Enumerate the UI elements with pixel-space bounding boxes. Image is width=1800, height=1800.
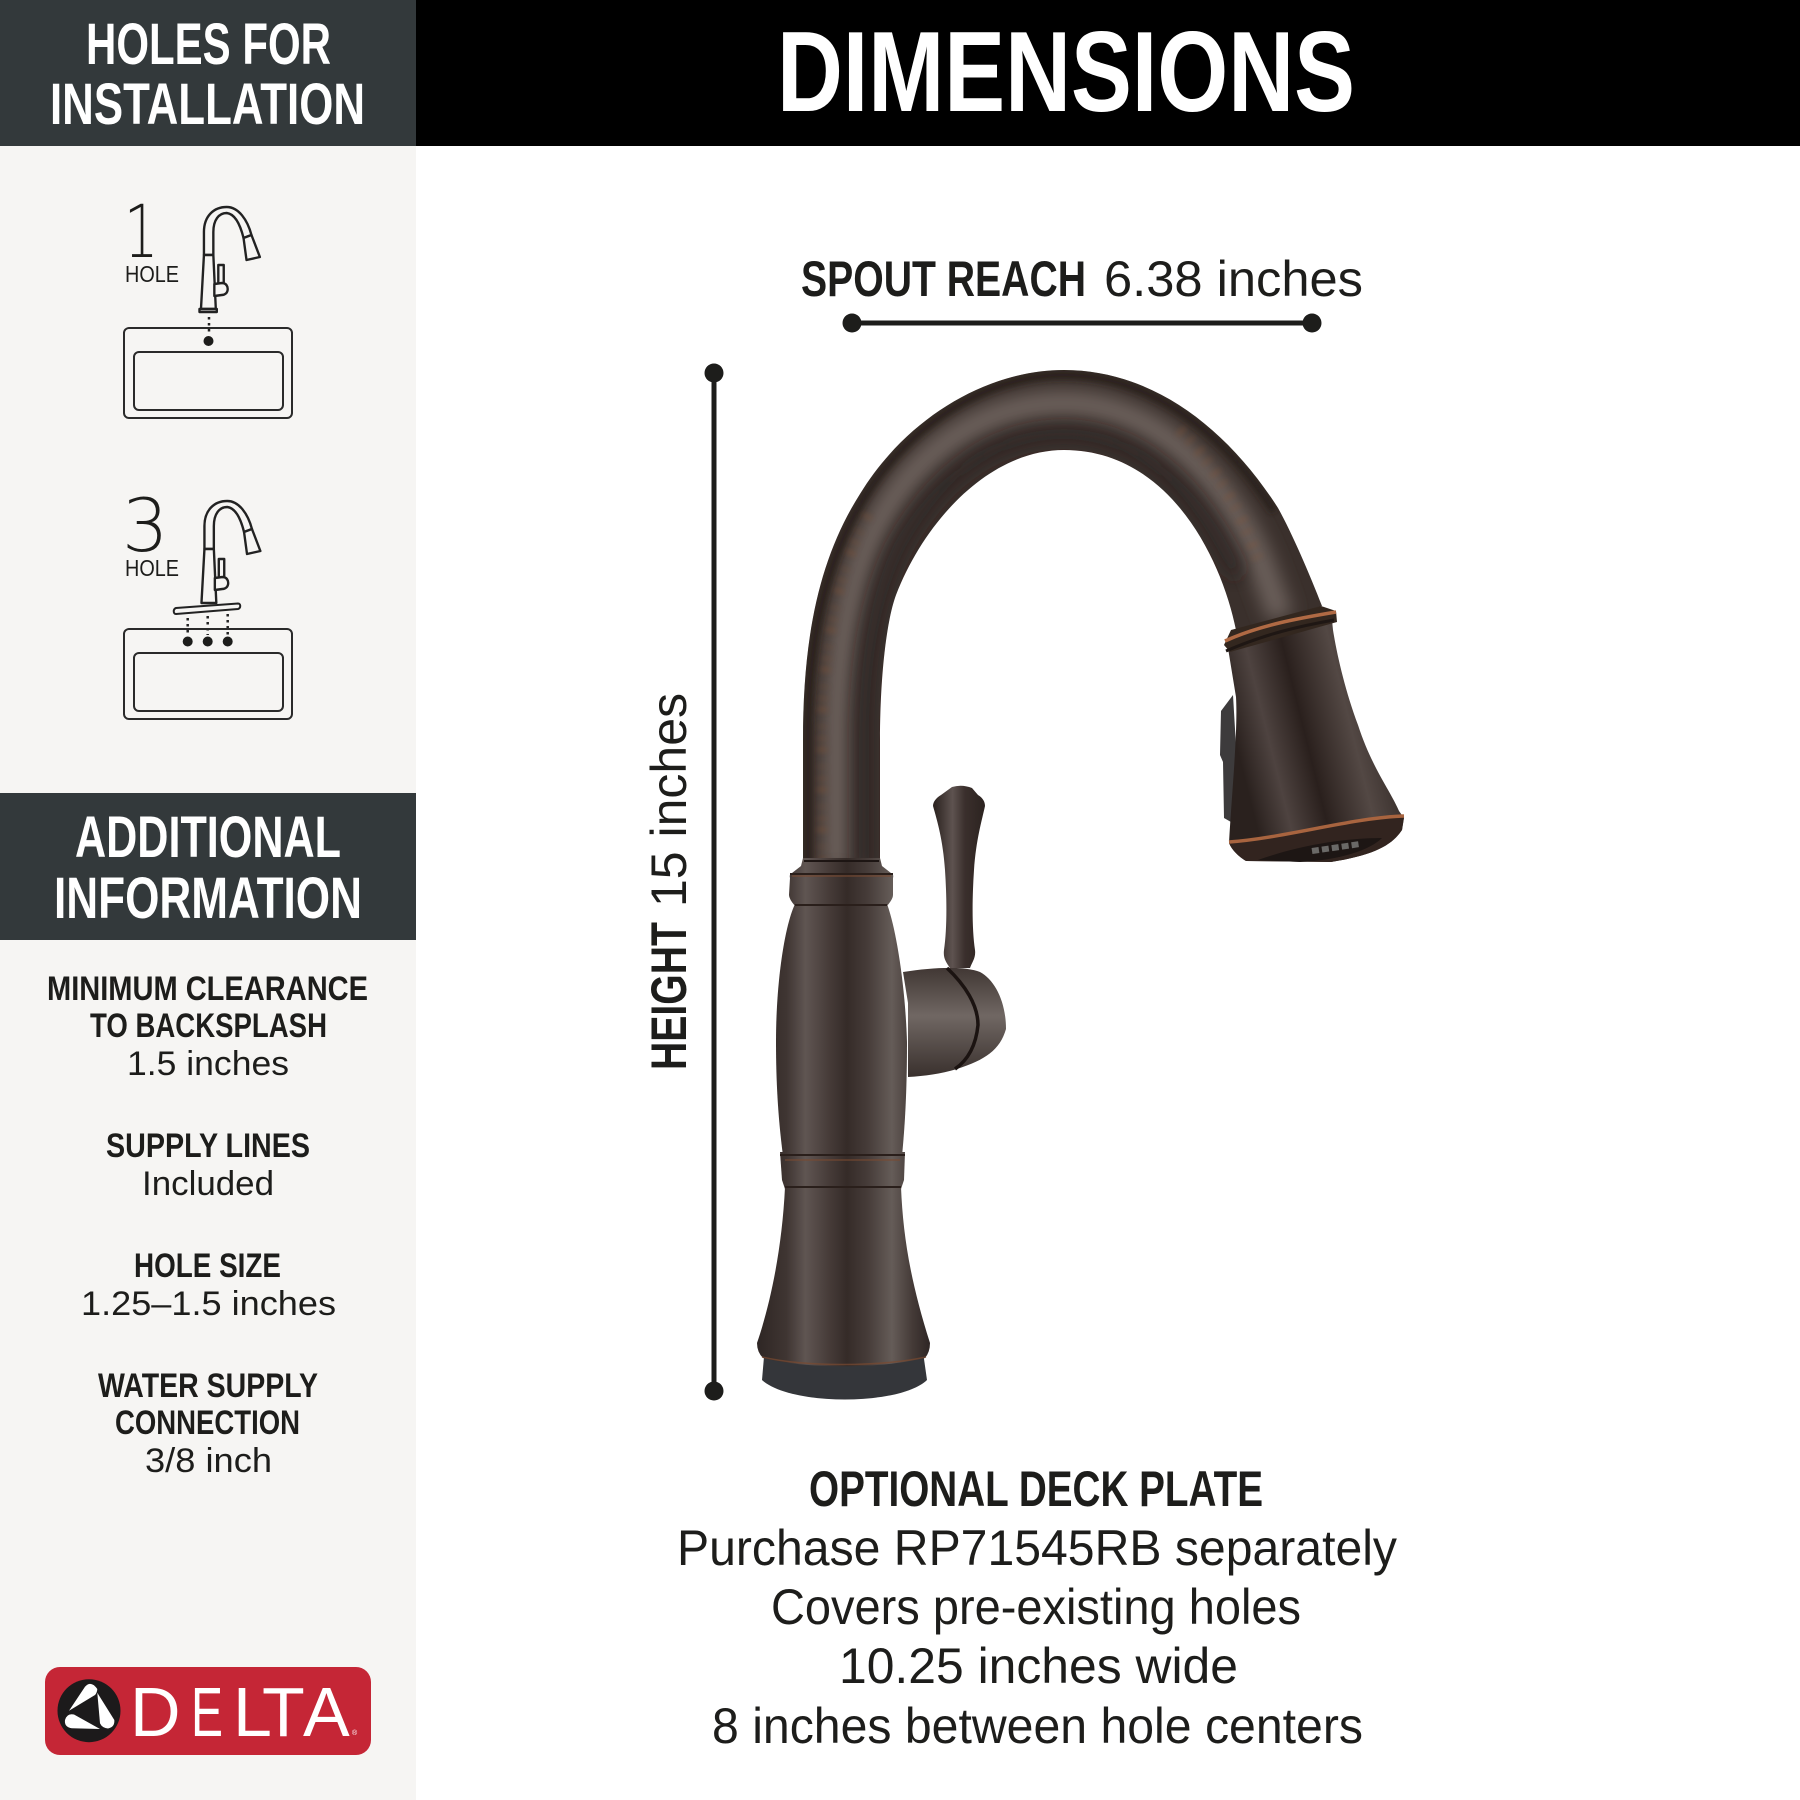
text block: water supply connection: [98, 1367, 318, 1480]
left sidebar panel: [0, 0, 416, 1800]
text block: hole size: HOLE SIZE: [134, 1247, 281, 1285]
icon: delta triangle mark: [58, 1679, 120, 1742]
label: 1 hole: [124, 190, 179, 287]
header: holes for installation: HOLES FOR: [86, 12, 331, 77]
header: additional information: INFORMATION: [54, 866, 362, 931]
label: 1 hole: HOLE: [125, 261, 179, 287]
text block: minimum clearance: 1.5 inches: [127, 1045, 289, 1083]
gasket: [762, 1345, 927, 1400]
text block: optional deck plate: 10.25 inches wide: [839, 1638, 1238, 1694]
title: dimensions: [416, 0, 1800, 146]
dimension label: spout reach: [801, 251, 1363, 307]
text block: hole size: 1.25–1.5 inches: [81, 1285, 336, 1323]
spray head: [1227, 610, 1404, 862]
base flare: [757, 1187, 930, 1366]
text block: supply lines: Included: [142, 1165, 274, 1203]
wordmark: D: [130, 1673, 181, 1751]
wordmark: [130, 1673, 350, 1751]
text block: minimum clearance: TO BACKSPLASH: [90, 1007, 327, 1045]
text block: supply lines: SUPPLY LINES: [106, 1127, 310, 1165]
wordmark: T: [262, 1673, 305, 1751]
text block: water supply connection: 3/8 inch: [145, 1442, 272, 1480]
header: holes for installation: [0, 0, 416, 146]
panel: 1 hole installation: [124, 190, 292, 418]
spray head trigger: [1220, 695, 1238, 822]
title: dimensions: DIMENSIONS: [777, 9, 1355, 136]
icon: deck plate: [174, 604, 240, 614]
text block: hole size: [81, 1247, 336, 1323]
collar lines: [780, 874, 905, 1187]
text block: optional deck plate: Covers pre-existing holes: [771, 1579, 1301, 1635]
faucet illustration: [757, 370, 1404, 1400]
wordmark: A: [303, 1673, 350, 1751]
text block: water supply connection: WATER SUPPLY: [98, 1367, 318, 1405]
spout: [803, 370, 1322, 870]
icon: sink with one hole: [124, 328, 292, 418]
wordmark: E: [191, 1673, 223, 1751]
icon: dotted connector: [208, 317, 210, 333]
dimension arrow: spout reach: [842, 314, 1322, 332]
logo: delta: [45, 1667, 371, 1755]
text block: minimum clearance: MINIMUM CLEARANCE: [47, 970, 368, 1008]
dimension label: spout reach: SPOUT REACH: [801, 251, 1086, 307]
dimension label: height: [641, 693, 697, 1070]
dimension label: height: 15 inches: [641, 693, 697, 907]
spray nozzles: [1312, 844, 1360, 851]
panel: 3 hole installation: [122, 484, 292, 719]
header: holes for installation: INSTALLATION: [50, 72, 365, 137]
collar ring: [1224, 606, 1337, 652]
text block: water supply connection: CONNECTION: [115, 1404, 300, 1442]
faucet body: [776, 904, 907, 1156]
icon: sink with three holes: [124, 629, 292, 719]
label: 3 hole: 3: [122, 484, 168, 569]
text block: optional deck plate: Purchase RP71545RB separately: [677, 1520, 1397, 1576]
spray face: [1258, 838, 1382, 862]
handle hub: [903, 968, 1006, 1077]
copper band: [1229, 816, 1404, 842]
text block: minimum clearance: [47, 970, 368, 1083]
handle lever: [933, 786, 985, 968]
handle groove: [947, 968, 978, 1069]
dimension label: spout reach: 6.38 inches: [1104, 251, 1363, 307]
text block: optional deck plate: OPTIONAL DECK PLATE: [809, 1461, 1263, 1517]
text block: optional deck plate: [677, 1461, 1397, 1754]
icon: small faucet: [199, 207, 260, 312]
header: additional information: ADDITIONAL: [75, 805, 341, 870]
icon: small faucet: [201, 501, 260, 603]
label: 3 hole: HOLE: [125, 555, 179, 581]
wordmark: L: [233, 1673, 272, 1751]
dimension arrow: height: [704, 364, 724, 1400]
lower collar: [780, 1152, 905, 1189]
text block: supply lines: [106, 1127, 310, 1203]
text block: optional deck plate: 8 inches between hole centers: [712, 1698, 1363, 1754]
faucet base collar: [789, 858, 893, 906]
logo: delta: ®: [352, 1729, 358, 1737]
label: 1 hole: 1: [124, 190, 158, 275]
header: additional information: [0, 793, 416, 940]
icon: dotted connectors: [188, 614, 228, 635]
bottom rim: [1229, 817, 1404, 862]
dimension label: height: HEIGHT: [641, 922, 697, 1070]
